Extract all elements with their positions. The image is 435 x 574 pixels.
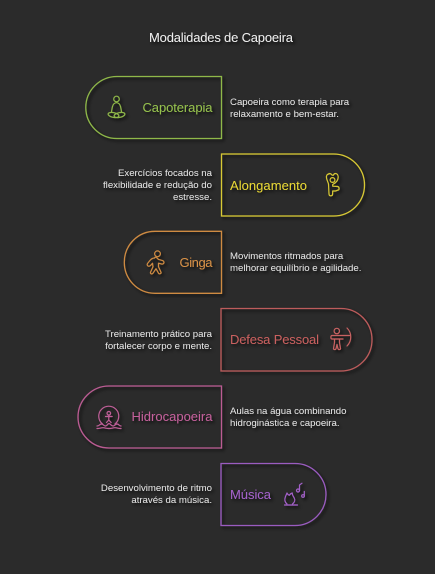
label: Ginga bbox=[180, 255, 213, 270]
panel: Capoterapia bbox=[86, 76, 222, 138]
text: Defesa Pessoal description: fortalecer corpo e mente. bbox=[105, 341, 212, 352]
icon: meditating person bbox=[108, 96, 125, 118]
panel outline: Música bbox=[221, 464, 326, 526]
text: Alongamento description: estresse. bbox=[173, 192, 212, 203]
panel outline: Alongamento bbox=[222, 154, 364, 216]
text: Música description: através da música. bbox=[131, 495, 212, 506]
panel: Defesa Pessoal bbox=[221, 308, 372, 371]
text: Capoterapia description: Capoeira como terapia para bbox=[230, 97, 350, 108]
text: Alongamento description: flexibilidade e redução do bbox=[103, 180, 212, 191]
label: Alongamento bbox=[230, 178, 307, 193]
panel outline: Capoterapia bbox=[86, 76, 222, 138]
panel outline: Ginga bbox=[124, 231, 222, 293]
icon: walking figure bbox=[147, 251, 164, 274]
text: Alongamento description: Exercícios focados na bbox=[118, 168, 213, 179]
label: Música bbox=[230, 487, 272, 502]
icon: person in water bbox=[97, 406, 121, 428]
icon: archer bbox=[331, 328, 351, 350]
panel: Alongamento bbox=[222, 154, 364, 216]
label: Capoterapia bbox=[142, 100, 213, 115]
text: Música description: Desenvolvimento de ritmo bbox=[101, 483, 212, 494]
panel: Hidrocapoeira bbox=[78, 386, 222, 448]
text: Ginga description: melhorar equilíbrio e agilidade. bbox=[230, 263, 361, 274]
icon: hands and music notes bbox=[284, 483, 304, 505]
label: Hidrocapoeira bbox=[132, 409, 213, 424]
panel outline: Defesa Pessoal bbox=[221, 308, 372, 371]
panel: Ginga bbox=[124, 231, 222, 293]
icon: stretching figure bbox=[326, 174, 339, 196]
text: Hidrocapoeira description: hidroginástica e capoeira. bbox=[230, 418, 340, 429]
panel: Música bbox=[221, 464, 326, 526]
text: Hidrocapoeira description: Aulas na água combinando bbox=[230, 406, 346, 417]
text: Ginga description: Movimentos ritmados para bbox=[230, 251, 344, 262]
text: Defesa Pessoal description: Treinamento prático para bbox=[105, 329, 213, 340]
label: Defesa Pessoal bbox=[230, 332, 319, 347]
text: Capoterapia description: relaxamento e bem-estar. bbox=[230, 109, 339, 120]
title: Modalidades de Capoeira bbox=[149, 30, 294, 45]
panel outline: Hidrocapoeira bbox=[78, 386, 222, 448]
